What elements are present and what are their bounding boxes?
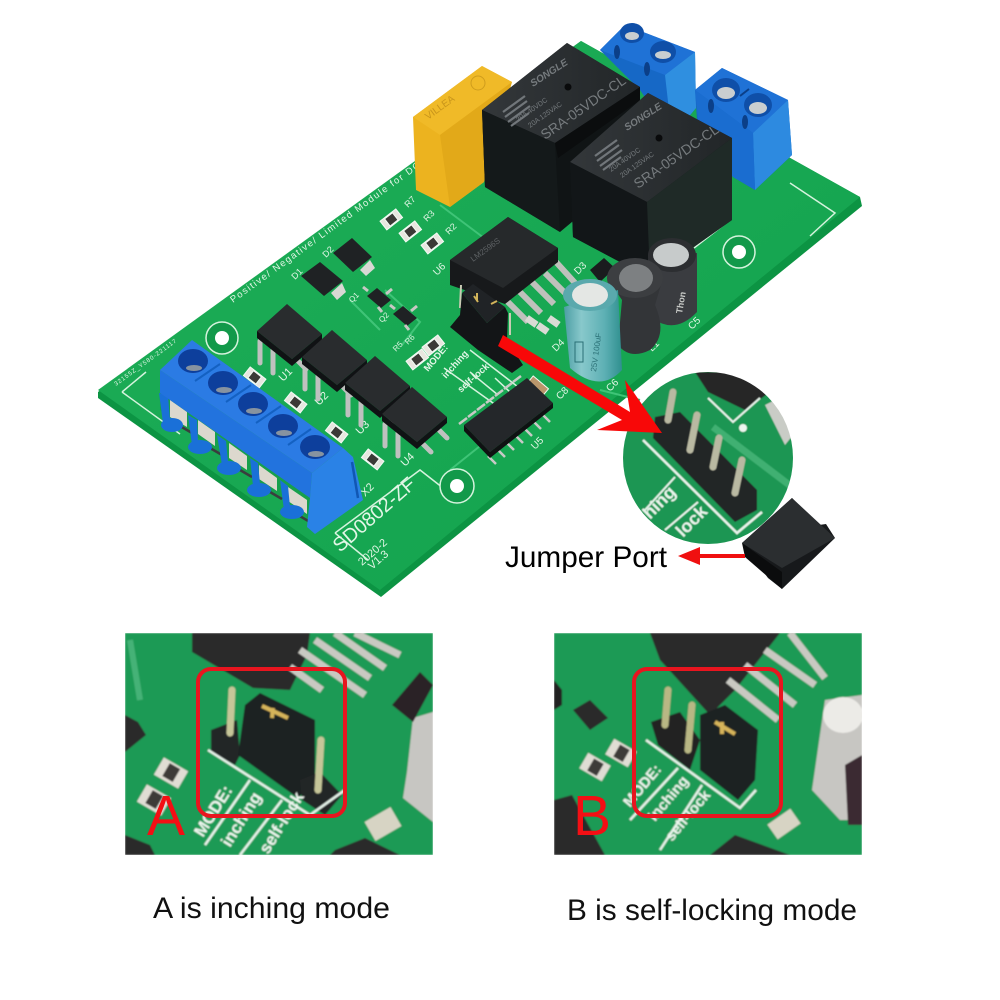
board silkscreen text: self-lock	[456, 361, 492, 395]
relay front: SONGLE	[623, 101, 664, 134]
board silkscreen text: C8	[554, 385, 571, 402]
board silkscreen text: R5	[391, 339, 405, 353]
board silkscreen text: D1	[289, 266, 305, 281]
small red arrow	[678, 547, 745, 565]
board silkscreen text: R3	[421, 208, 437, 223]
board silkscreen text	[114, 160, 703, 572]
board silkscreen text: D3	[572, 260, 589, 277]
yellow capacitor	[413, 66, 512, 207]
board silkscreen text: U2	[313, 390, 331, 408]
mounting holes	[206, 236, 755, 503]
two-way terminal block rear	[600, 23, 696, 137]
magnified jumper port circle: lock	[672, 501, 712, 541]
board silkscreen text: U3	[354, 419, 372, 437]
magnified jumper port circle: hing	[639, 482, 680, 523]
board silkscreen text: V1.3	[366, 548, 391, 572]
board silkscreen text: D4	[550, 337, 567, 354]
magnified jumper port circle	[620, 370, 796, 546]
inductor	[607, 258, 663, 354]
board silkscreen text: Q1	[347, 290, 361, 304]
board silkscreen text: U4	[399, 451, 417, 469]
letter B: B	[573, 784, 611, 848]
caption A: A is inching mode	[153, 892, 390, 925]
board silkscreen text: D2	[320, 244, 336, 259]
circuit board	[98, 41, 862, 597]
IC U6 with legs	[450, 217, 576, 335]
photo A: inching mode: inching	[217, 789, 265, 850]
photo B: self-locking mode: MODE:	[620, 761, 665, 811]
diodes and transistors	[301, 238, 417, 330]
board silkscreen text: U6	[431, 261, 448, 278]
board silkscreen text: R6	[403, 332, 417, 346]
large red arrow	[498, 335, 662, 433]
SOP14 chip U5	[459, 376, 553, 464]
board silkscreen text: Positive/ Negative/ Limited Module for DC	[228, 160, 423, 305]
letter A: A	[147, 784, 185, 848]
board silkscreen text: Q2	[377, 310, 391, 324]
red highlight B	[634, 669, 781, 816]
relay front: SRA-05VDC-CL	[631, 121, 722, 191]
optocouplers U1-U4	[257, 304, 447, 456]
board silkscreen text: 32155Z_Y580-221117	[114, 338, 178, 388]
photo A: inching mode: self-lock	[255, 788, 308, 857]
photo A: inching mode	[125, 633, 433, 857]
jumper cap	[742, 498, 835, 589]
IC U6 with legs: LM2596S	[469, 236, 502, 264]
board silkscreen text: L1	[646, 338, 662, 354]
photo B: self-locking mode: inching	[645, 773, 692, 825]
board silkscreen text: 2020-2	[356, 537, 390, 568]
two-way terminal block front	[695, 68, 792, 190]
relay front: 20A 125VAC	[619, 151, 656, 180]
board silkscreen text: C5	[686, 315, 703, 332]
red highlight A	[198, 669, 345, 816]
label: Jumper Port: Jumper Port	[505, 541, 668, 574]
relay rear: 20A 125VAC	[527, 101, 564, 130]
small black capacitor	[648, 238, 697, 325]
relay front: 20A 40VDC	[608, 147, 642, 174]
relay rear: 20A 40VDC	[515, 97, 549, 124]
teal electrolytic capacitor: 25V 100uF	[589, 332, 603, 372]
yellow capacitor: VILLEA	[423, 93, 457, 122]
jumper on board	[450, 284, 523, 373]
board silkscreen text: MODE:	[422, 343, 451, 374]
photo A: inching mode: MODE:	[190, 782, 236, 840]
board silkscreen text: X2	[359, 481, 377, 499]
board silkscreen text: R2	[443, 221, 459, 236]
board silkscreen text: inching	[440, 348, 471, 381]
board silkscreen text: U5	[529, 435, 546, 452]
small black capacitor: Thon	[674, 291, 688, 314]
board silkscreen text: R7	[402, 194, 418, 209]
relay rear	[482, 43, 640, 232]
board silkscreen text: SD0802-ZF	[329, 473, 420, 557]
photo B: self-locking mode	[554, 633, 863, 855]
teal electrolytic capacitor	[563, 279, 622, 382]
five-way terminal block	[159, 340, 363, 534]
caption B: B is self-locking mode	[567, 894, 857, 927]
board silkscreen text: C6	[604, 377, 621, 394]
relay rear: SRA-05VDC-CL	[538, 72, 629, 142]
board silkscreen text: U1	[277, 366, 295, 384]
diode D3	[590, 258, 615, 282]
relay rear: SONGLE	[529, 57, 570, 90]
photo B: self-locking mode: self-lock	[662, 787, 715, 845]
resistors	[243, 209, 549, 470]
relay front	[570, 93, 732, 278]
